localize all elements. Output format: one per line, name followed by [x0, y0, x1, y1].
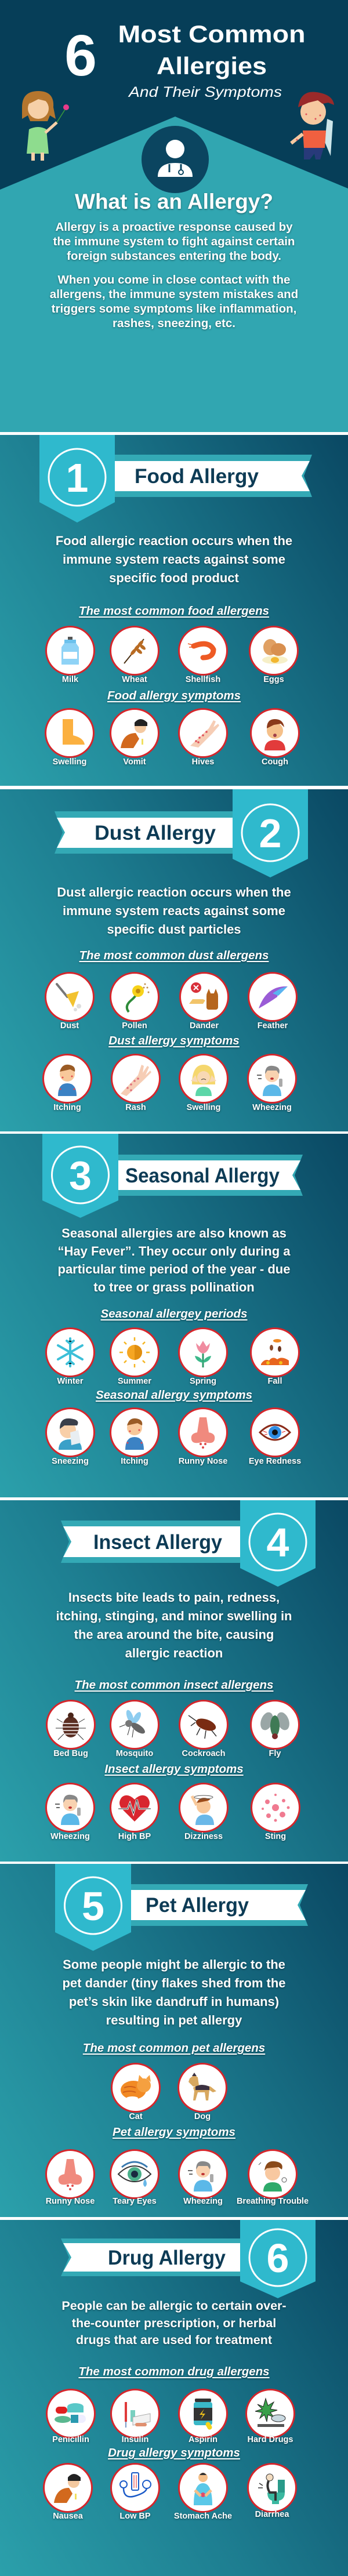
- symptom: stomach ache: [178, 2463, 228, 2524]
- symptom: low bp: Low BP: [119, 2512, 151, 2521]
- panel: pet allergy: [0, 1864, 348, 2217]
- allergen: wheat: [110, 626, 160, 684]
- allergen: feather: [248, 972, 298, 1031]
- symptom: high bp: [110, 1783, 160, 1844]
- badge: 5: 5: [82, 1884, 104, 1929]
- symptom: runny nose: Runny Nose: [46, 2197, 95, 2206]
- text: allergy definition: the immune system to fight against certain: [53, 235, 295, 248]
- period: summer: Summer: [118, 1377, 151, 1386]
- text: allergy definition: [52, 220, 295, 264]
- allergen: hard drugs: Hard Drugs: [248, 2435, 293, 2444]
- text: insect description: [0, 1588, 348, 1663]
- symptom: sneezing: [45, 1407, 95, 1467]
- allergen: eggs: Eggs: [263, 675, 284, 684]
- ribbon: Seasonal Allergy: Seasonal Allergy: [125, 1164, 280, 1187]
- heading: seasonal periods: Seasonal allergey periods: [101, 1307, 247, 1320]
- symptom: teary eyes: Teary Eyes: [113, 2197, 157, 2206]
- symptom: rash: [111, 1054, 161, 1112]
- symptom: itching: Itching: [53, 1103, 81, 1112]
- ribbon: Seasonal Allergy: [118, 1155, 303, 1196]
- symptom: nausea: [43, 2463, 93, 2524]
- title: 6 Most Common Allergies: And Their Symptoms: [128, 84, 282, 100]
- allergen: dust: Dust: [60, 1021, 79, 1031]
- heading: drug allergens: The most common drug allergens: [78, 2365, 270, 2378]
- symptom: itching: Itching: [121, 1457, 148, 1466]
- allergen: milk: [45, 626, 95, 684]
- heading: seasonal symptoms: Seasonal allergy symptoms: [96, 1388, 252, 1402]
- allergen: feather: Feather: [258, 1021, 288, 1031]
- title: 6 Most Common Allergies: [64, 20, 305, 100]
- symptom: low bp: [110, 2463, 160, 2524]
- badge: 4: 4: [267, 1520, 289, 1565]
- allergen: dander: Dander: [190, 1021, 219, 1031]
- ribbon: Insect Allergy: Insect Allergy: [93, 1531, 223, 1554]
- allergen: dust: [45, 972, 95, 1031]
- text: pet description: pet dander (tiny flakes shed from the: [62, 1976, 286, 1990]
- ribbon: Dust Allergy: [55, 811, 233, 854]
- title: 6 Most Common Allergies: 6: [64, 23, 97, 88]
- panel: food allergy: [0, 435, 348, 786]
- symptom: runny nose: Runny Nose: [179, 1457, 227, 1466]
- panel: drug allergy: [0, 2220, 348, 2576]
- text: pet description: resulting in pet allergy: [106, 2013, 242, 2027]
- symptom: itching: [42, 1054, 92, 1113]
- header panel: [0, 0, 348, 432]
- ribbon: Drug Allergy: [61, 2238, 240, 2276]
- ribbon: Food Allergy: [115, 455, 312, 497]
- heading: food allergens: The most common food allergens: [79, 604, 269, 618]
- text: seasonal description: to tree or grass pollination: [93, 1280, 255, 1294]
- icon: doctor: [142, 126, 209, 193]
- text: drug description: People can be allergic to certain over-: [61, 2299, 287, 2313]
- symptom: eye redness: [248, 1407, 302, 1467]
- ribbon: Pet Allergy: Pet Allergy: [146, 1894, 249, 1917]
- allergen: penicillin: Penicillin: [52, 2435, 89, 2444]
- allergen: cockroach: [179, 1700, 229, 1761]
- symptom: rash: Rash: [125, 1103, 146, 1112]
- allergen: pollen: Pollen: [122, 1021, 147, 1031]
- ribbon: Drug Allergy: Drug Allergy: [108, 2247, 226, 2269]
- period: summer: [110, 1327, 160, 1386]
- symptom: breathing trouble: [248, 2149, 298, 2211]
- symptom: eye redness: Eye Redness: [249, 1457, 301, 1466]
- allergen: cat: [111, 2063, 161, 2124]
- symptom: cough: [250, 708, 300, 768]
- allergen: shellfish: [178, 626, 228, 684]
- text: insect description: Insects bite leads to pain, redness,: [68, 1590, 280, 1605]
- allergen: cat: Cat: [129, 2112, 143, 2121]
- text: allergy definition: foreign substances entering the body.: [67, 249, 281, 263]
- allergen: cockroach: Cockroach: [182, 1749, 225, 1758]
- badge: 2: 2: [259, 811, 281, 856]
- text: immune reaction: When you come in close contact with the: [58, 273, 290, 286]
- symptom: runny nose: [177, 1407, 228, 1467]
- symptom: diarrhea: Diarrhea: [255, 2510, 289, 2519]
- symptom: hives: Hives: [192, 757, 214, 767]
- text: food description: specific food product: [109, 571, 239, 585]
- allergen: dander: [179, 972, 229, 1031]
- allergen: insulin: [110, 2389, 160, 2450]
- badge: 2: [233, 789, 308, 877]
- text: dust description: immune system reacts against some: [63, 904, 285, 918]
- title: 6 Most Common Allergies: Most Common: [118, 20, 305, 48]
- heading: insect allergens: The most common insect allergens: [75, 1678, 273, 1692]
- symptom: swelling: [179, 1054, 229, 1113]
- badge: 6: [240, 2220, 316, 2298]
- badge: 3: 3: [69, 1153, 92, 1198]
- allergen: aspirin: Aspirin: [188, 2435, 217, 2444]
- allergen: bed bug: Bed Bug: [53, 1749, 88, 1758]
- panel: insect allergy: [0, 1500, 348, 1862]
- symptom: stomach ache: Stomach Ache: [174, 2512, 232, 2521]
- heading: drug symptoms: Drug allergy symptoms: [108, 2446, 240, 2459]
- symptom: diarrhea: [247, 2463, 297, 2524]
- text: food description: [56, 534, 292, 586]
- heading: dust allergens: The most common dust allergens: [79, 949, 269, 962]
- text: seasonal description: particular time period of the year - due: [58, 1262, 290, 1276]
- text: dust description: Dust allergic reaction occurs when the: [57, 885, 291, 899]
- symptom: wheezing: [45, 1783, 95, 1844]
- symptom: vomit: [110, 708, 160, 767]
- badge: 1: 1: [66, 455, 88, 500]
- symptom: wheezing: [247, 1054, 297, 1113]
- text: pet description: [0, 1955, 348, 2030]
- text: immune reaction: rashes, sneezing, etc.: [113, 317, 235, 330]
- text: insect description: itching, stinging, and minor swelling in: [56, 1609, 292, 1623]
- symptom: dizziness: Dizziness: [184, 1832, 223, 1841]
- allergen: fly: [250, 1700, 300, 1761]
- symptom: runny nose: [45, 2149, 95, 2211]
- text: seasonal description: “Hay Fever”. They occur only during a: [58, 1244, 290, 1258]
- allergen: bed bug: [46, 1700, 96, 1761]
- badge: 5: [55, 1864, 131, 1951]
- illustration: girl with flower: [22, 91, 69, 161]
- symptom: nausea: Nausea: [53, 2512, 83, 2521]
- symptom: vomit: Vomit: [123, 757, 146, 767]
- allergen: pollen: [110, 972, 160, 1031]
- text: food description: Food allergic reaction occurs when the: [56, 534, 292, 548]
- text: insect description: allergic reaction: [125, 1646, 223, 1660]
- text: insect description: the area around the bite, causing: [74, 1627, 274, 1642]
- symptom: sting: [251, 1783, 300, 1844]
- text: pet description: pet’s skin like dandruff in humans): [69, 1994, 279, 2009]
- symptom: cough: Cough: [262, 757, 288, 767]
- panel: seasonal allergy: [0, 1134, 348, 1497]
- symptom: swelling: Swelling: [53, 757, 86, 767]
- text: immune reaction: [49, 273, 299, 331]
- period: fall: Fall: [268, 1377, 282, 1386]
- allergen: mosquito: [110, 1700, 160, 1761]
- period: winter: [45, 1327, 95, 1386]
- symptom: hives: [178, 708, 228, 767]
- period: fall: [250, 1327, 300, 1386]
- allergen: hard drugs: [245, 2389, 295, 2450]
- symptom: wheezing: [178, 2149, 228, 2211]
- period: winter: Winter: [57, 1377, 83, 1386]
- symptom: dizziness: [179, 1783, 229, 1844]
- allergen: eggs: [249, 626, 299, 685]
- text: seasonal description: [57, 1226, 291, 1296]
- allergen: insulin: Insulin: [122, 2435, 148, 2444]
- heading: dust symptoms: Dust allergy symptoms: [108, 1034, 240, 1047]
- ribbon: Pet Allergy: [131, 1884, 308, 1926]
- symptom: swelling: Swelling: [187, 1103, 220, 1112]
- illustration: boy with rash: [290, 92, 334, 159]
- heading: insect symptoms: Insect allergy symptoms: [104, 1762, 244, 1776]
- period: spring: Spring: [190, 1377, 216, 1386]
- allergen: mosquito: Mosquito: [116, 1749, 153, 1758]
- text: dust description: [57, 885, 291, 938]
- text: drug description: [0, 2298, 348, 2349]
- allergen: dog: [177, 2063, 227, 2124]
- allergen: dog: Dog: [194, 2112, 211, 2121]
- ribbon: Insect Allergy: [61, 1521, 240, 1563]
- text: seasonal description: Seasonal allergies are also known as: [61, 1226, 287, 1240]
- badge: 1: [39, 435, 115, 523]
- text: drug description: drugs that are used for treatment: [76, 2333, 272, 2347]
- text: dust description: specific dust particles: [107, 922, 241, 937]
- allergen: fly: Fly: [269, 1749, 281, 1758]
- symptom: wheezing: Wheezing: [252, 1103, 292, 1112]
- allergen: penicillin: [46, 2389, 96, 2450]
- badge: 3: [42, 1134, 118, 1218]
- title: 6 Most Common Allergies: Allergies: [157, 52, 267, 79]
- heading: pet symptoms: Pet allergy symptoms: [113, 2125, 235, 2139]
- allergen: shellfish: Shellfish: [186, 675, 220, 684]
- ribbon: Food Allergy: Food Allergy: [135, 465, 259, 488]
- badge: 6: 6: [267, 2236, 289, 2281]
- text: food description: immune system reacts against some: [63, 552, 285, 567]
- text: allergy definition: Allergy is a proactive response caused by: [55, 220, 293, 234]
- symptom: swelling: [45, 708, 95, 768]
- heading: food symptoms: Food allergy symptoms: [107, 689, 241, 702]
- allergen: milk: Milk: [62, 675, 78, 684]
- symptom: high bp: High BP: [118, 1832, 151, 1841]
- panel: dust allergy: [0, 789, 348, 1131]
- text: pet description: Some people might be allergic to the: [63, 1957, 285, 1972]
- badge: 4: [240, 1500, 316, 1587]
- period: spring: [178, 1327, 228, 1387]
- text: immune reaction: allergens, the immune system mistakes and: [50, 288, 298, 301]
- symptom: wheezing: Wheezing: [183, 2197, 223, 2206]
- symptom: sting: Sting: [265, 1832, 286, 1841]
- symptom: itching: [110, 1407, 160, 1467]
- ribbon: Dust Allergy: Dust Allergy: [95, 822, 216, 844]
- text: drug description: the-counter prescription, or herbal: [72, 2316, 276, 2330]
- symptom: wheezing: Wheezing: [50, 1832, 90, 1841]
- symptom: teary eyes: [110, 2149, 160, 2211]
- allergen: wheat: Wheat: [122, 675, 147, 684]
- symptom: breathing trouble: Breathing Trouble: [237, 2197, 309, 2206]
- text: immune reaction: triggers some symptoms like inflammation,: [52, 302, 296, 315]
- allergen: aspirin: [178, 2389, 228, 2450]
- heading: pet allergens: The most common pet allergens: [83, 2041, 265, 2055]
- symptom: sneezing: Sneezing: [52, 1457, 89, 1466]
- heading: What is an Allergy?: What is an Allergy?: [75, 190, 273, 213]
